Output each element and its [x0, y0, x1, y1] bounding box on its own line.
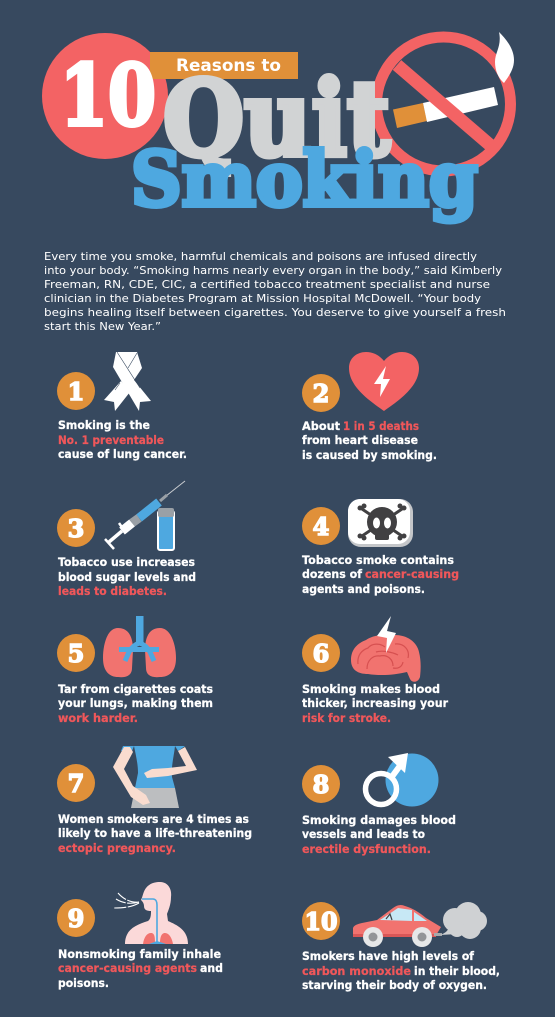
- text: reason 9: [58, 947, 223, 990]
- number badges: 6: [313, 639, 329, 668]
- number badges: 3: [68, 514, 84, 543]
- text: reason 6: thicker, increasing your: [302, 696, 448, 710]
- number badges: 4: [313, 512, 329, 541]
- title ribbon: Reasons to: Reasons to: [176, 56, 281, 76]
- intro text: into your body. “Smoking harms nearly every organ in the body,” said Kimberly: [44, 264, 503, 277]
- intro text: clinician in the Diabetes Program at Mission Hospital McDowell. “Your body: [44, 292, 482, 305]
- text: reason 7: Women smokers are 4 times as: [58, 812, 249, 826]
- text: reason 10: [302, 949, 500, 992]
- icon: syringe and vial: [105, 481, 185, 550]
- text: reason 6: [302, 682, 448, 725]
- text: reason 8: vessels and leads to: [302, 827, 425, 841]
- text: reason 7: likely to have a life-threatening: [58, 826, 252, 840]
- icon: person inhaling smoke: [114, 882, 188, 944]
- text: reason 10: in their blood,: [414, 964, 500, 978]
- text: reason 2: is caused by smoking.: [302, 448, 437, 462]
- intro text: Freeman, RN, CDE, CIC, a certified tobacco treatment specialist and nurse: [44, 278, 490, 291]
- text: reason 9: Nonsmoking family inhale: [58, 947, 221, 961]
- text: reason 9: cancer-causing agents: [58, 961, 197, 975]
- text: reason 3: [58, 555, 196, 598]
- text: reason 2: from heart disease: [302, 433, 418, 447]
- icon: ribbon: [104, 352, 151, 411]
- text: reason 8: [302, 813, 456, 856]
- text: reason 5: Tar from cigarettes coats: [58, 682, 213, 696]
- number badges: 5: [68, 639, 84, 668]
- intro text: [44, 250, 506, 333]
- number badges: 10: [304, 907, 338, 936]
- number badges: 8: [313, 770, 329, 799]
- text: reason 6: Smoking makes blood: [302, 682, 440, 696]
- text: reason 7: [58, 812, 252, 855]
- text: reason 5: [58, 682, 213, 725]
- text: reason 5: your lungs, making them: [58, 696, 213, 710]
- text: reason 1: [58, 418, 187, 461]
- number badges: 7: [68, 769, 84, 798]
- text: reason 3: Tobacco use increases: [58, 555, 195, 569]
- number badges: 9: [68, 904, 84, 933]
- title badge: red circle: [42, 33, 168, 159]
- text: reason 2: About: [302, 419, 340, 433]
- number badges: 1: [68, 377, 84, 406]
- text: reason 9: and: [200, 961, 223, 975]
- icon: car with exhaust cloud: [353, 902, 487, 947]
- title: [42, 33, 478, 224]
- intro text: Every time you smoke, harmful chemicals and poisons are infused directly: [44, 250, 478, 263]
- number badges: 2: [313, 379, 329, 408]
- text: reason 9: poisons.: [58, 976, 109, 990]
- text: reason 10: carbon monoxide: [302, 964, 411, 978]
- text: reason 10: Smokers have high levels of: [302, 949, 475, 963]
- text: reason 8: erectile dysfunction.: [302, 842, 431, 856]
- number badges: [57, 372, 340, 940]
- icon: brain with lightning: [351, 616, 421, 682]
- icon: male symbol: [366, 753, 438, 806]
- text: reason 2: [302, 419, 437, 462]
- text: reason 3: blood sugar levels and: [58, 570, 196, 584]
- icon: no smoking sign: [376, 32, 514, 171]
- title ribbon: Reasons to: [150, 52, 298, 79]
- text: reason 3: leads to diabetes.: [58, 584, 167, 598]
- text: reason 2: 1 in 5 deaths: [343, 419, 419, 433]
- intro text: start this New Year.”: [44, 320, 161, 333]
- text: reason 4: dozens of: [302, 567, 363, 581]
- text: reason 4: cancer-causing: [365, 567, 459, 581]
- text: reason 8: Smoking damages blood: [302, 813, 456, 827]
- icon: woman's torso: [113, 746, 197, 808]
- text: reason 5: work harder.: [58, 711, 138, 725]
- text: reason 4: [302, 553, 459, 596]
- title word: Smoking: Smoking: [131, 136, 478, 224]
- icon: skull and crossbones: [348, 499, 413, 547]
- text: reason 7: ectopic pregnancy.: [58, 841, 176, 855]
- title word: Quit: Quit: [163, 57, 390, 180]
- intro text: begins healing itself between cigarettes. You deserve to give yourself a fresh: [44, 306, 506, 319]
- text: reason 4: agents and poisons.: [302, 582, 425, 596]
- text: reason 1: cause of lung cancer.: [58, 447, 187, 461]
- icon: heart: [349, 352, 419, 411]
- title number: 10: 10: [60, 46, 156, 145]
- text: reason 1: Smoking is the: [58, 418, 150, 432]
- text: reason 6: risk for stroke.: [302, 711, 391, 725]
- text: reason 10: starving their body of oxygen.: [302, 978, 487, 992]
- text: reason 1: No. 1 preventable: [58, 433, 164, 447]
- text: reason 4: Tobacco smoke contains: [302, 553, 454, 567]
- icon: lungs: [103, 616, 176, 677]
